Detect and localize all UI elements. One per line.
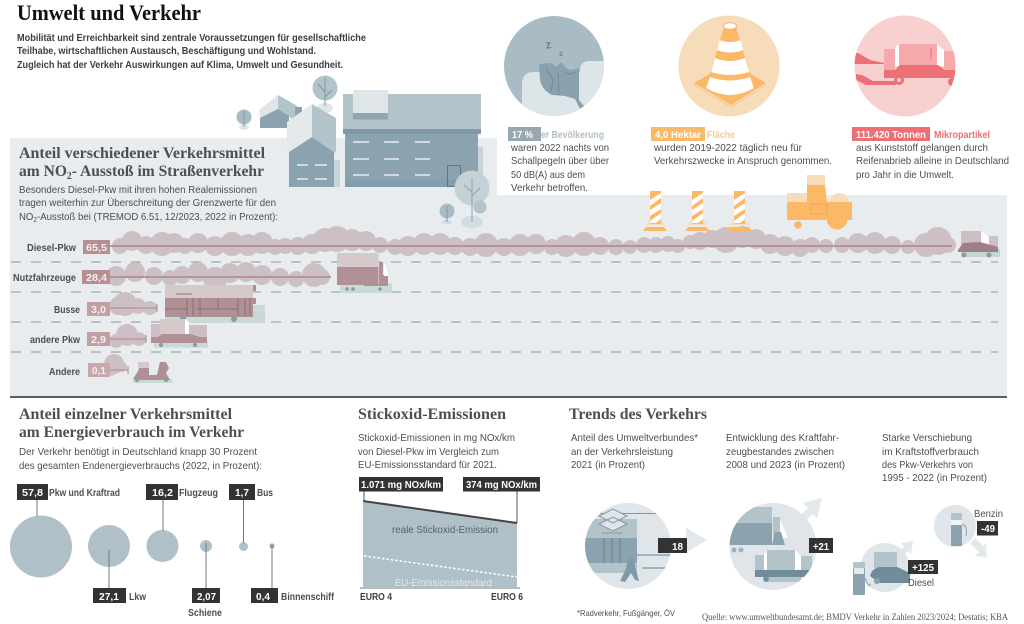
item: Schiene: 2,07: [197, 592, 216, 603]
area chart: 374 mg NOx/km: [466, 480, 537, 491]
text: trend 3: Starke Verschiebung: [882, 433, 972, 444]
icon: tall house: [287, 104, 340, 187]
label: andere Pkw: [30, 332, 110, 346]
NO2 description: -Ausstoß bei (TREMOD 6.51, 12/2023, 2022 in Prozent):: [37, 212, 278, 223]
text: land: [653, 143, 832, 167]
lane dashes: [11, 262, 998, 352]
label: 111.420 Tonnen: Mikropartikel: [934, 130, 990, 141]
text: trend 3: [882, 433, 987, 484]
area chart: 1.071 mg NOx/km: [361, 480, 441, 491]
label: Busse: [54, 302, 110, 316]
text: energy: Der Verkehr benötigt in Deutschland knapp 30 Prozent: [19, 447, 257, 458]
item: Binnenschiff: [251, 588, 334, 603]
icon: diesel pump and car: [853, 541, 938, 595]
icon: tree right: [454, 170, 490, 228]
heading: energy: Anteil einzelner Verkehrsmittel: [19, 406, 233, 423]
heading: Stickoxid: Stickoxid-Emissionen: [358, 406, 506, 423]
item: Flugzeug: Flugzeug: [179, 488, 218, 499]
heading: NO2 share: - Ausstoß im Straßenverkehr: [72, 163, 264, 180]
icon: sleeping person: z: [544, 37, 552, 52]
icon: truck and car trend: +21: [813, 542, 829, 553]
label: 17 %: [508, 127, 604, 141]
icon: scooter: [133, 362, 172, 383]
text: land: Verkehrszwecke in Anspruch genommen.: [654, 156, 832, 167]
NO2 description: [19, 185, 278, 224]
area chart: [359, 477, 540, 603]
illustration: houses and trees: [236, 76, 490, 228]
label: andere Pkw: 2,9: [91, 335, 106, 346]
item: Pkw und Kraftrad: [17, 484, 120, 500]
icon: car small: [151, 319, 208, 348]
text: noise: Schallpegeln über über: [511, 156, 609, 167]
intro text: Mobilität und Erreichbarkeit sind zentrale Voraussetzungen für gesellschaftliche: [17, 33, 366, 44]
row: Diesel-Pkw clouds: [112, 226, 956, 257]
heading: NO2 share: am NO: [19, 163, 68, 180]
label: 4,0 Hektar: Fläche: [707, 130, 735, 141]
item: Bus: 1,7: [235, 488, 249, 499]
icon: diesel pump and car: +125: [912, 563, 934, 574]
heading: NO2 share: Anteil verschiedener Verkehrsmittel: [19, 145, 266, 162]
item: Schiene: [188, 588, 222, 619]
icon: diesel pump and car: Diesel: [908, 578, 934, 589]
text: energy: [19, 447, 262, 472]
text: trend 3: 1995 - 2022 (in Prozent): [882, 473, 987, 484]
panel: NO2 background: [10, 138, 1007, 397]
intro text: Teilhabe, wirtschaftlichen Austausch, Beschäftigung und Wohlstand.: [17, 46, 316, 57]
divider: [10, 396, 1007, 398]
icon: small house: [259, 95, 302, 128]
heading: trends: Trends des Verkehrs: [569, 406, 707, 423]
panel: noise stat: [504, 16, 610, 194]
bubble chart: [10, 484, 334, 619]
bar chart: NO2 by vehicle: [13, 226, 956, 378]
label: 4,0 Hektar: 4,0 Hektar: [655, 130, 701, 141]
source: Quelle: www.umweltbundesamt.de; BMDV Verkehr in Zahlen 2023/2024; Destatis; KBA: [702, 612, 1008, 622]
text: microplastic: pro Jahr in die Umwelt.: [856, 170, 954, 181]
row: Busse clouds: [109, 292, 157, 316]
item: Binnenschiff: Binnenschiff: [281, 592, 334, 603]
text: microplastic: [856, 143, 1009, 181]
text: energy: des gesamten Endenergieverbrauchs (2022, in Prozent):: [19, 461, 262, 472]
text: trend 1: 2021 (in Prozent): [571, 460, 645, 471]
heading: energy: [19, 406, 244, 441]
label: Busse: Busse: [54, 305, 80, 316]
label: Andere: 0,1: [92, 366, 106, 377]
title: Umwelt und Verkehr: [17, 0, 201, 25]
label: Andere: [49, 363, 110, 378]
item: Pkw und Kraftrad: Pkw und Kraftrad: [49, 488, 120, 499]
row: Andere clouds: [102, 354, 127, 376]
panel: nitrogen oxide emissions: [358, 406, 540, 603]
icon: barriers: [643, 191, 752, 231]
label: 17 %: 17 %: [512, 130, 533, 141]
icon: tree front: [440, 204, 454, 224]
text: land: wurden 2019-2022 täglich neu für: [653, 143, 803, 154]
icon: petrol pump: Benzin: [974, 509, 1003, 520]
area chart: EU-Emissionsstandard: [395, 578, 492, 589]
label: Nutzfahrzeuge: [13, 270, 110, 284]
label: Diesel-Pkw: [27, 240, 110, 254]
row: Nutzfahrzeuge clouds: [106, 262, 330, 291]
label: Diesel-Pkw: 65,5: [86, 243, 107, 254]
icon: car with tyre abrasion: [854, 16, 957, 116]
icon: petrol pump: -49: [981, 524, 995, 535]
text: noise: 50 dB(A) aus dem: [511, 170, 585, 181]
area chart: reale Stickoxid-Emission: [392, 525, 498, 536]
label: Nutzfahrzeuge: 28,4: [86, 273, 107, 284]
row: andere Pkw clouds: [109, 324, 146, 348]
text: trend 2: zeugbestandes zwischen: [726, 447, 834, 458]
text: trend 3: des Pkw-Verkehrs von: [882, 460, 973, 471]
panel: land stat: [651, 16, 832, 167]
text: trend 1: an der Verkehrsleistung: [571, 447, 673, 458]
label: 4,0 Hektar: [651, 127, 735, 141]
text: trend 2: [726, 433, 845, 471]
item: Lkw: 27,1: [99, 592, 119, 603]
icon: large building: [343, 90, 483, 187]
panel: microplastic stat: [852, 16, 1009, 181]
panel: energy use: [10, 406, 334, 619]
label: Diesel-Pkw: Diesel-Pkw: [27, 243, 77, 254]
icon: tree top: [312, 76, 338, 113]
panel: trends: [569, 406, 1003, 595]
NO2 description: NO: [19, 212, 35, 223]
intro text: [17, 33, 366, 71]
text: trend 3: im Kraftstoffverbrauch: [882, 447, 979, 458]
text: noise: Verkehr betroffen.: [511, 183, 588, 194]
icon: truck: [337, 253, 392, 293]
barrier 3: [727, 191, 752, 231]
item: Lkw: Lkw: [129, 592, 147, 603]
area chart: EURO 4: [360, 592, 392, 603]
intro text: Zugleich hat der Verkehr Auswirkungen auf Klima, Umwelt und Gesundheit.: [17, 60, 343, 71]
text: Stickoxid: EU-Emissionsstandard für 2021.: [358, 460, 497, 471]
barrier 2: [685, 191, 710, 231]
barrier 1: [643, 191, 667, 231]
footnote: *Radverkehr, Fußgänger, ÖV: [577, 608, 675, 618]
text: microplastic: Reifenabrieb alleine in Deutschland: [856, 156, 1009, 167]
icon: petrol pump: [934, 505, 1003, 557]
heading: NO2 share: [19, 145, 266, 182]
text: trend 1: [571, 433, 698, 471]
icon: train and pedestrian trend: 18: [672, 542, 683, 553]
text: Stickoxid: [358, 433, 515, 471]
NO2 description: 2: [33, 217, 37, 224]
item: Flugzeug: 16,2: [152, 488, 173, 499]
text: trend 1: Anteil des Umweltverbundes*: [571, 433, 698, 444]
text: trend 2: 2008 und 2023 (in Prozent): [726, 460, 845, 471]
item: Binnenschiff: 0,4: [256, 592, 270, 603]
label: Busse: 3,0: [91, 305, 106, 316]
label: Nutzfahrzeuge: Nutzfahrzeuge: [13, 273, 76, 284]
icon: truck and car trend: [725, 498, 833, 590]
text: Stickoxid: Stickoxid-Emissionen in mg NOx/km: [358, 433, 515, 444]
item: Flugzeug: [146, 484, 218, 500]
item: Lkw: [93, 588, 147, 603]
icon: train and pedestrian trend: [585, 503, 707, 589]
item: Schiene: Schiene: [188, 608, 222, 619]
icon: sleeping person: z: [559, 49, 563, 58]
text: microplastic: aus Kunststoff gelangen durch: [856, 143, 988, 154]
text: trend 2: Entwicklung des Kraftfahr-: [726, 433, 839, 444]
NO2 description: tragen weiterhin zur Überschreitung der Grenzwerte für den: [19, 197, 276, 209]
label: 17 %: er Bevölkerung: [541, 130, 604, 141]
heading: energy: am Energieverbrauch im Verkehr: [19, 424, 244, 441]
label: 111.420 Tonnen: [852, 127, 990, 141]
icon: car right: [958, 231, 1000, 258]
label: Andere: Andere: [49, 367, 80, 378]
item: Pkw und Kraftrad: 57,8: [22, 488, 43, 499]
area chart: EURO 6: [491, 592, 523, 603]
text: noise: waren 2022 nachts von: [510, 143, 609, 154]
item: Bus: Bus: [257, 488, 273, 499]
NO2 description: Besonders Diesel-Pkw mit ihren hohen Realemissionen: [19, 185, 257, 196]
icon: bus: [165, 285, 265, 323]
item: Bus: [229, 484, 273, 500]
icon: sleeping person: [504, 16, 610, 120]
icon: traffic cone: [678, 16, 780, 116]
icon: road roller: [787, 175, 852, 230]
text: Stickoxid: von Diesel-Pkw im Vergleich zum: [358, 447, 499, 458]
label: andere Pkw: andere Pkw: [30, 335, 81, 346]
icon: tree small: [236, 110, 252, 130]
heading: NO2 share: 2: [67, 171, 72, 182]
text: noise: [510, 143, 609, 194]
label: 111.420 Tonnen: 111.420 Tonnen: [856, 130, 926, 141]
